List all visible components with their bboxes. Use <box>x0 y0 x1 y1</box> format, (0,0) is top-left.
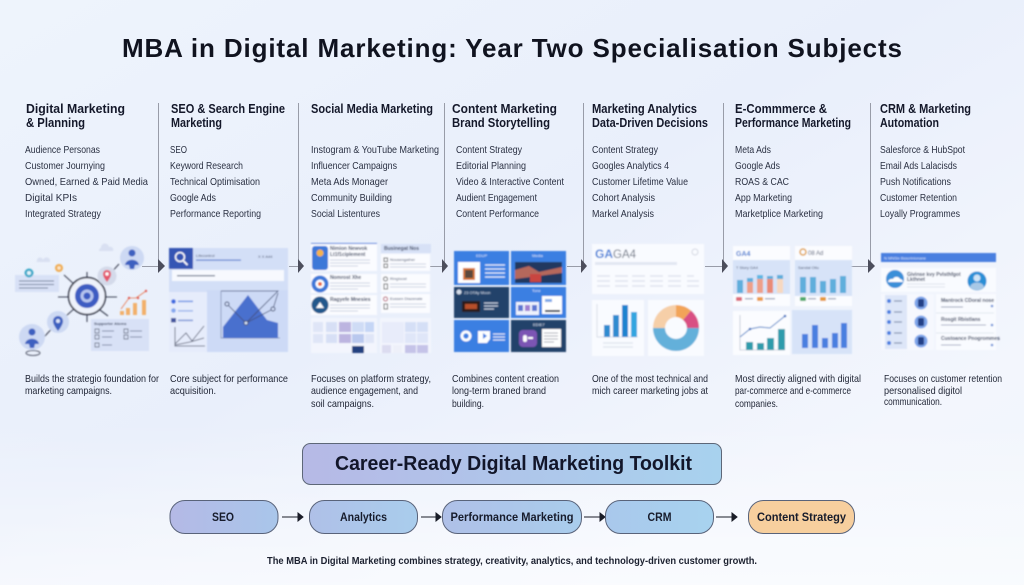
illustration: target and journey: Supporter Atoms <box>94 321 127 326</box>
description <box>884 373 1002 408</box>
toolkit heading box: Career-Ready Digital Marketing Toolkit <box>335 453 692 475</box>
arrow <box>421 513 441 521</box>
subject list: Customer Retention <box>880 192 957 204</box>
subject list: Googles Analytics 4 <box>592 160 669 172</box>
heading <box>171 102 285 130</box>
heading: & Planning <box>26 116 85 130</box>
subject list: Integrated Strategy <box>25 208 102 220</box>
subject list: Community Building <box>311 192 392 204</box>
description: audience engagement, and <box>311 385 418 397</box>
heading: CRM & Marketing <box>880 102 971 116</box>
arrow <box>282 513 303 521</box>
description: One of the most technical and <box>592 373 708 385</box>
subject list: Customer Lifetime Value <box>592 176 688 188</box>
subject list: Audient Engagement <box>456 192 537 204</box>
illustration: search dashboard: Lifecontrol <box>196 253 215 258</box>
description: mich career marketing jobs at <box>592 385 708 397</box>
heading: Marketing Analytics <box>592 102 697 116</box>
subject list <box>592 144 688 220</box>
illustration: social media dashboard <box>311 243 431 353</box>
subject list: App Marketing <box>735 192 792 204</box>
subject list <box>456 144 564 220</box>
illustration: social media dashboard: Nousengather <box>390 257 416 262</box>
heading <box>592 102 708 130</box>
subject list: Push Notifications <box>880 176 951 188</box>
toolkit pathway <box>170 500 854 534</box>
illustration: social media dashboard: Businegat Nos <box>384 246 419 252</box>
description: Focuses on customer retention <box>884 373 1002 385</box>
illustration: content tiles: Media <box>532 253 544 258</box>
illustration: social media dashboard: Lt1f1ciplement <box>330 252 366 258</box>
heading: Automation <box>880 116 939 130</box>
description: Focuses on platform strategy, <box>311 373 431 385</box>
description <box>592 373 708 397</box>
subject list: Content Performance <box>456 208 539 220</box>
subject list: Meta Ads Monager <box>311 176 388 188</box>
illustration: performance charts: GA4 <box>736 251 750 258</box>
heading: Brand Storytelling <box>452 116 550 130</box>
subject list: Markel Analysis <box>592 208 654 220</box>
footer note: The MBA in Digital Marketing combines strategy, creativity, analytics, and technology-driven customer growth. <box>267 555 757 567</box>
subject list: Video & Interactive Content <box>456 176 564 188</box>
column 6: E-Commerce & Performance Marketing <box>733 102 861 410</box>
illustration: social media dashboard: Nomrost Xhe <box>330 275 361 281</box>
illustration: social media dashboard: Ringloost <box>390 276 408 281</box>
subject list: Meta Ads <box>735 144 771 156</box>
subject list: Email Ads Lalacisds <box>880 160 957 172</box>
subject list: Digital KPIs <box>25 192 77 204</box>
column 1: Digital Marketing & Planning <box>15 102 159 397</box>
column 5: Marketing Analytics Data-Driven Decisions <box>592 102 708 397</box>
subject list: Influencer Campaigns <box>311 160 397 172</box>
illustration: content tiles: EDUP <box>476 253 487 258</box>
subject list: Content Strategy <box>592 144 659 156</box>
illustration: analytics dashboard: GA <box>595 247 613 261</box>
description: acquisition. <box>170 385 216 397</box>
pill: CRM: CRM <box>648 512 672 524</box>
title: MBA in Digital Marketing: Year Two Specialisation Subjects <box>122 33 902 63</box>
column 7: CRM & Marketing Automation <box>880 102 1002 408</box>
illustration: analytics dashboard <box>592 244 704 356</box>
heading: Marketing <box>171 116 222 130</box>
pill: Performance Marketing: Performance Marketing <box>450 512 574 524</box>
description: par-commerce and e-commerce <box>735 385 851 397</box>
illustration: social media dashboard: Eussen Diazenate <box>390 296 423 301</box>
subject list: Editorial Planning <box>456 160 526 172</box>
subject list: Google Ads <box>735 160 780 172</box>
illustration: social media dashboard: Nimion Newvok <box>330 246 367 252</box>
pill: Performance Marketing <box>442 500 582 534</box>
pill: Content Strategy: Content Strategy <box>757 512 847 524</box>
subject list <box>25 144 148 220</box>
pill: CRM <box>606 500 714 534</box>
subject list: SEO <box>170 144 187 156</box>
heading: SEO & Search Engine <box>171 102 285 116</box>
heading <box>26 102 125 130</box>
illustration: search dashboard: X X A44 <box>258 254 273 259</box>
subject list: Cohort Analysis <box>592 192 655 204</box>
illustration: CRM dashboard: Custoance Pnogrommes <box>941 336 1000 342</box>
illustration: target and journey <box>15 243 149 356</box>
column 4: Content Marketing Brand Storytelling <box>452 102 566 410</box>
description <box>25 373 159 397</box>
illustration: content tiles: 23 OTAy Moon <box>464 290 491 295</box>
heading: Digital Marketing <box>26 102 125 116</box>
description: Builds the strategio foundation for <box>25 373 159 385</box>
pill: SEO <box>170 500 278 534</box>
toolkit heading box <box>302 444 722 484</box>
illustration: CRM dashboard: Lkthnet <box>907 277 925 283</box>
illustration: performance charts <box>733 246 852 355</box>
pill: Content Strategy <box>748 500 854 534</box>
subject list: Instogram & YouTube Marketing <box>311 144 439 156</box>
subject list: Audience Personas <box>25 144 100 156</box>
description: marketing campaigns. <box>25 385 112 397</box>
subject list <box>735 144 823 220</box>
arrow <box>716 513 737 521</box>
subject list: Customer Journying <box>25 160 105 172</box>
heading: Content Marketing <box>452 102 557 116</box>
subject list: Performance Reporting <box>170 208 261 220</box>
illustration: CRM dashboard: Givinse kvy Pvlsthfgot <box>907 272 961 278</box>
subject list: Loyally Programmes <box>880 208 960 220</box>
heading <box>735 102 851 130</box>
subject list: Google Ads <box>170 192 216 204</box>
description <box>735 373 861 410</box>
heading <box>452 102 557 130</box>
illustration: content tiles <box>454 251 566 352</box>
subject list: Marketplice Marketing <box>735 208 823 220</box>
description: communication. <box>884 396 942 408</box>
illustration: social media dashboard: Ragyefe Mnesies <box>330 297 371 303</box>
subject list <box>170 144 261 220</box>
heading <box>880 102 971 130</box>
illustration: analytics dashboard: GA4 <box>613 249 637 261</box>
subject list <box>880 144 965 220</box>
description: personalised digitol <box>884 385 962 397</box>
illustration: CRM dashboard: Rosgit Rbistlans <box>941 317 981 323</box>
column 3: Social Media Marketing <box>311 102 439 410</box>
description <box>452 373 559 410</box>
flow connectors between columns <box>142 103 875 273</box>
illustration: content tiles: Tone <box>532 288 541 293</box>
subject list: Technical Optimisation <box>170 176 260 188</box>
illustration: performance charts: 08 Ad <box>808 251 823 257</box>
heading: Data-Driven Decisions <box>592 116 708 130</box>
description: Core subject for performance <box>170 373 288 385</box>
heading: Performance Marketing <box>735 116 851 130</box>
description: soil campaigns. <box>311 398 374 410</box>
illustration: CRM dashboard <box>881 253 1000 350</box>
subject list <box>311 144 439 220</box>
subject list: ROAS & CAC <box>735 176 789 188</box>
subject list: Social Listentures <box>311 208 380 220</box>
column 2: SEO & Search Engine Marketing <box>169 102 288 397</box>
description: companies. <box>735 398 778 410</box>
illustration: content tiles: EDIE7 <box>533 322 545 327</box>
heading: E-Commmerce & <box>735 102 827 116</box>
arrow <box>584 513 605 521</box>
illustration: CRM dashboard: N MNSix Bsscrinionane <box>884 256 927 260</box>
subject list: Content Strategy <box>456 144 523 156</box>
description <box>170 373 288 397</box>
pill: SEO: SEO <box>212 512 234 524</box>
illustration: performance charts: Sandal Otlu <box>798 265 819 270</box>
heading: Social Media Marketing <box>311 102 433 116</box>
illustration: CRM dashboard: Mantrock CDoral nose <box>941 298 994 304</box>
description <box>311 373 431 410</box>
pill: Analytics <box>310 500 418 534</box>
pill: Analytics: Analytics <box>340 512 387 524</box>
illustration: search dashboard <box>169 248 288 352</box>
subject list: Keyword Research <box>170 160 243 172</box>
description: Most directiy aligned with digital <box>735 373 861 385</box>
description: Combines content creation <box>452 373 559 385</box>
illustration: performance charts: T Story GA4 <box>736 265 759 270</box>
description: building. <box>452 398 484 410</box>
subject list: Salesforce & HubSpot <box>880 144 965 156</box>
description: long-term braned brand <box>452 385 546 397</box>
subject list: Owned, Earned & Paid Media <box>25 176 148 188</box>
